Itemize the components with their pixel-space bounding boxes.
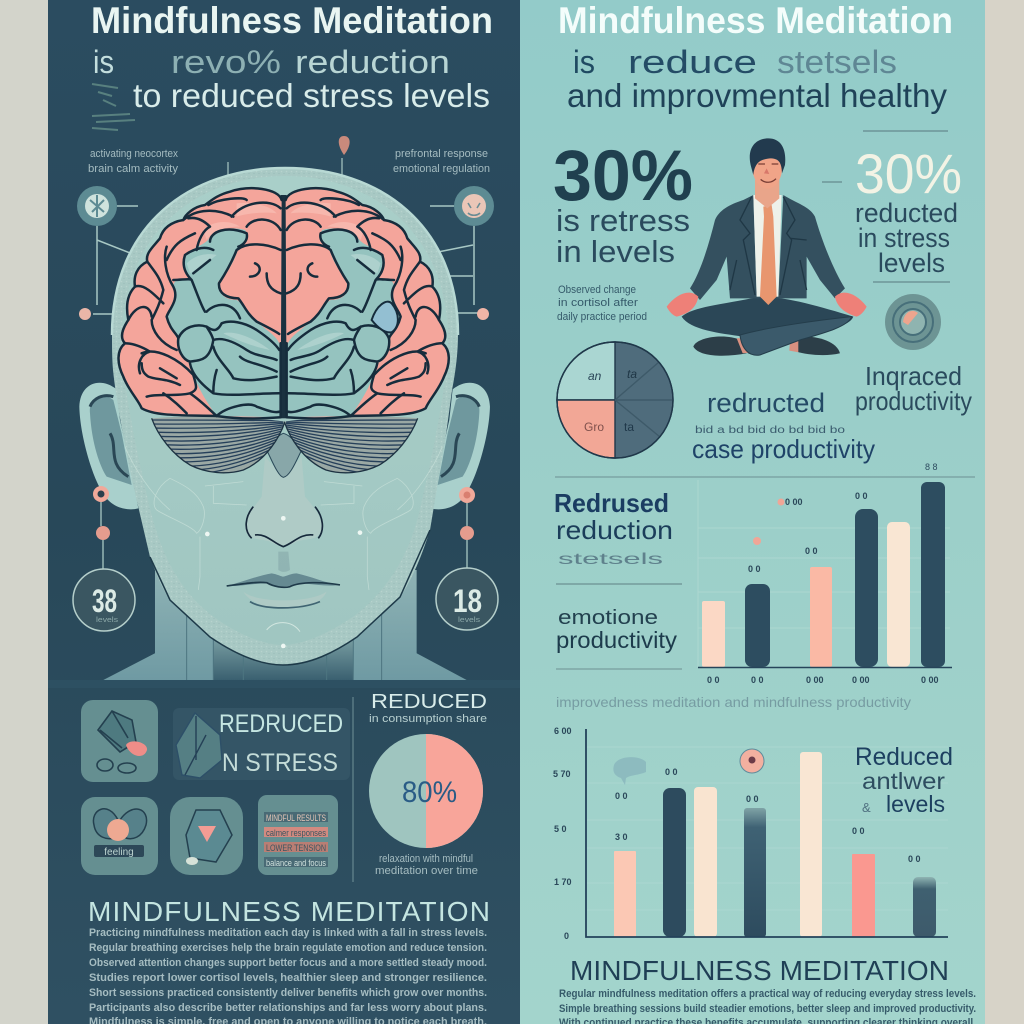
- chart: productivity bars: 0 00: [785, 497, 803, 507]
- text block: left paragraph: Practicing mindfulness meditation each day is linked with a fall in stress levels.: [89, 927, 487, 939]
- stat: 30% left: in levels: [556, 234, 675, 269]
- panel: right teal stats column: [520, 0, 985, 1024]
- title: left heading: to reduced stress levels: [133, 77, 490, 114]
- chart: reduced pie: 80%: [402, 776, 457, 809]
- chart: pie of four slices: ta: [627, 367, 637, 381]
- text block: productivity labels: case productivity: [692, 434, 875, 464]
- title: left heading: Mindfulness Meditation: [91, 0, 493, 41]
- text block: left paragraph: Observed attention changes support better focus and a more settled steady mood.: [89, 957, 487, 969]
- card: round flower icon: feeling: [104, 847, 134, 858]
- face details: [125, 433, 442, 648]
- heading: mindfulness meditation right: MINDFULNESS MEDITATION: [570, 955, 949, 986]
- illustration: meditation goggles striped eyes: [150, 417, 419, 475]
- text block: left paragraph: Regular breathing exercises help the brain regulate emotion and reduce tension.: [89, 942, 487, 954]
- title: right heading: is: [573, 44, 595, 80]
- callout: lower left nodes: levels: [96, 617, 119, 624]
- card: striped text: balance and focus: [266, 858, 326, 868]
- card: reduced in stress: N STRESS: [222, 749, 338, 777]
- text block: reduced anxiety: Reduced: [855, 743, 953, 771]
- chart: stress bars: 5 0: [554, 824, 567, 834]
- divider: [352, 697, 354, 882]
- chart: stress bars: 0: [564, 931, 569, 941]
- card: round flower icon: [81, 797, 158, 875]
- card: striped text: [258, 795, 338, 875]
- illustration: nose: [245, 433, 322, 572]
- text block: right paragraph: Regular mindfulness meditation offers a practical way of reducing everyday stress levels.: [559, 988, 976, 1000]
- chart: reduced pie: relaxation with mindful: [379, 853, 473, 865]
- card: reduced in stress: [173, 708, 350, 780]
- callout labels above brain: brain calm activity: [88, 163, 179, 175]
- man: tie: [760, 205, 777, 305]
- callout: lower left nodes: [73, 486, 135, 631]
- text block: reduced anxiety: levels: [886, 791, 945, 817]
- stat: 30% left: [553, 137, 693, 269]
- chart: reduced pie: [369, 691, 487, 877]
- card: striped text: calmer responses: [266, 828, 326, 838]
- text block: reduced anxiety: [855, 743, 953, 817]
- text block: small note: [557, 284, 647, 323]
- text block: small note: daily practice period: [557, 311, 647, 323]
- chart: reduced pie: in consumption share: [369, 713, 487, 725]
- text block: productivity labels: Inqraced: [865, 361, 962, 391]
- text block: left paragraph: [89, 927, 487, 1024]
- callout: lower right nodes: [436, 487, 498, 630]
- icon: chart pin: [740, 749, 764, 773]
- caption: chart divider text: improvedness meditation and mindfulness productivity: [556, 694, 911, 710]
- title: right heading: and improvmental healthy: [567, 77, 948, 114]
- card: striped text: MINDFUL RESULTS: [266, 813, 326, 823]
- text block: small note: Observed change: [558, 284, 636, 296]
- icon: spiral medallion: [885, 294, 941, 350]
- chart: reduced pie: meditation over time: [375, 865, 478, 877]
- illustration: neck and shoulders: [103, 570, 467, 680]
- chart: productivity bars: 0 00: [921, 675, 939, 685]
- chart: stress bars: 0 0: [665, 767, 678, 777]
- illustration: ears: [79, 383, 490, 509]
- title: right heading: [558, 0, 953, 114]
- text block: productivity labels: productivity: [855, 386, 972, 416]
- chart: stress bars: 1 70: [554, 877, 572, 887]
- man: legs: [682, 297, 853, 355]
- callout labels above brain: activating neocortex: [90, 148, 178, 160]
- icon: right connector medallion: [430, 186, 494, 320]
- title: right heading: reduce: [628, 44, 757, 80]
- title: right heading: stetsels: [777, 44, 897, 80]
- text block: reduction labels: reduction: [556, 515, 673, 545]
- chart: pie of four slices: Gro: [584, 420, 604, 434]
- chart: pie of four slices: an: [588, 369, 602, 383]
- text block: reduction labels: productivity: [556, 627, 678, 653]
- face highlight dots: [205, 516, 362, 648]
- stat: 30% right: [822, 131, 962, 282]
- chart: stress bars: 0 0: [746, 794, 759, 804]
- callout labels above brain: [88, 148, 490, 175]
- chart: productivity bars: 0 00: [806, 675, 824, 685]
- chart: stress bars: 0 0: [852, 826, 865, 836]
- stat: 30% left: 30%: [553, 137, 693, 216]
- man: hair: [750, 138, 785, 175]
- brain highlight lobe: [372, 302, 398, 332]
- text block: productivity labels: [692, 361, 972, 472]
- text block: reduction labels: [554, 488, 682, 669]
- text block: reduction labels: emotione: [558, 607, 658, 629]
- illustration: meditating man: [667, 138, 867, 356]
- chart: productivity bars: 0 0: [805, 546, 818, 556]
- text block: small note: in cortisol after: [558, 297, 638, 309]
- illustration: brain: [119, 188, 449, 419]
- text block: right paragraph: Simple breathing sessions build steadier emotions, better sleep and improved productivity.: [559, 1003, 976, 1015]
- icon: left connector medallion: [77, 186, 138, 320]
- man: face: [752, 145, 782, 189]
- text block: reduction labels: stetsels: [558, 551, 663, 568]
- stat: 30% right: levels: [878, 248, 945, 278]
- text block: left paragraph: Short sessions practiced consistently deliver benefits which grow over months.: [89, 987, 487, 999]
- chart: reduced pie: REDUCED: [371, 691, 487, 713]
- chart: stress bars: 3 0: [615, 832, 628, 842]
- illustration: head and face: [112, 168, 458, 665]
- chart: stress bars: 0 0: [615, 791, 628, 801]
- text block: reduced anxiety: antlwer: [862, 768, 945, 794]
- title: right heading: Mindfulness Meditation: [558, 0, 953, 41]
- title: left heading: [91, 0, 493, 114]
- stat: 30% right: 30%: [855, 142, 962, 205]
- chart: productivity bars: [698, 480, 952, 685]
- panel: left dark brain column: [48, 0, 520, 1024]
- callout: lower right nodes: 18: [453, 583, 482, 619]
- text block: left paragraph: Studies report lower cortisol levels, healthier sleep and stronger resilience.: [89, 972, 487, 984]
- title: left heading: reduction: [295, 44, 450, 80]
- callout labels above brain: emotional regulation: [393, 163, 490, 175]
- icon: small globe: [613, 757, 646, 785]
- man: lapels: [730, 197, 807, 295]
- icon: top pin: [228, 136, 350, 187]
- shoulder band: [48, 680, 520, 688]
- chart: productivity bars: 0 00: [852, 675, 870, 685]
- card: lotus icon: [170, 797, 243, 875]
- chart: productivity bars: 0 0: [855, 491, 868, 501]
- chart: stress bars: 5 70: [553, 769, 571, 779]
- text block: right paragraph: [559, 988, 976, 1024]
- title: left heading: is: [93, 44, 114, 80]
- man: shoes: [693, 336, 840, 356]
- card: reduced in stress: REDRUCED: [219, 710, 343, 738]
- callout: lower right nodes: levels: [458, 617, 481, 624]
- chart: pie of four slices: [557, 342, 673, 458]
- chart: stress bars: 0 0: [908, 854, 921, 864]
- man: neck: [755, 180, 779, 208]
- text block: productivity labels: redructed: [707, 388, 825, 418]
- callout: lower left nodes: 38: [92, 583, 117, 619]
- heading: mindfulness meditation left: MINDFULNESS MEDITATION: [88, 896, 490, 927]
- man: hands: [667, 293, 698, 317]
- text block: left paragraph: Participants also describe better relationships and far less worry about plans.: [89, 1002, 487, 1014]
- callout labels above brain: prefrontal response: [395, 148, 488, 160]
- man: shirt: [753, 195, 782, 297]
- text block: reduced anxiety: &: [862, 800, 871, 815]
- illustration: mouth: [227, 573, 340, 632]
- card: leaf and heart icon: [81, 700, 158, 782]
- stat: 30% right: reducted: [855, 198, 958, 228]
- man: torso and arms: [690, 195, 845, 300]
- chart: productivity bars: 0 0: [751, 675, 764, 685]
- icon: scribbled marks beside heading: [92, 84, 135, 130]
- chart: pie of four slices: ta: [624, 420, 634, 434]
- chart: stress bars: 6 00: [554, 726, 572, 736]
- text block: productivity labels: bid a bd bid do bd bid bo: [695, 425, 846, 436]
- chart: productivity bars: 0 0: [748, 564, 761, 574]
- chart: productivity bars: 0 0: [707, 675, 720, 685]
- text block: reduction labels: Redrused: [554, 488, 669, 518]
- chart: stress bars: [553, 726, 948, 941]
- stat: 30% right: in stress: [858, 223, 950, 253]
- card: striped text: LOWER TENSION: [266, 843, 326, 853]
- stat: 30% left: is retress: [556, 203, 690, 238]
- text block: productivity labels: 8 8: [925, 462, 938, 472]
- title: left heading: revo%: [171, 44, 281, 80]
